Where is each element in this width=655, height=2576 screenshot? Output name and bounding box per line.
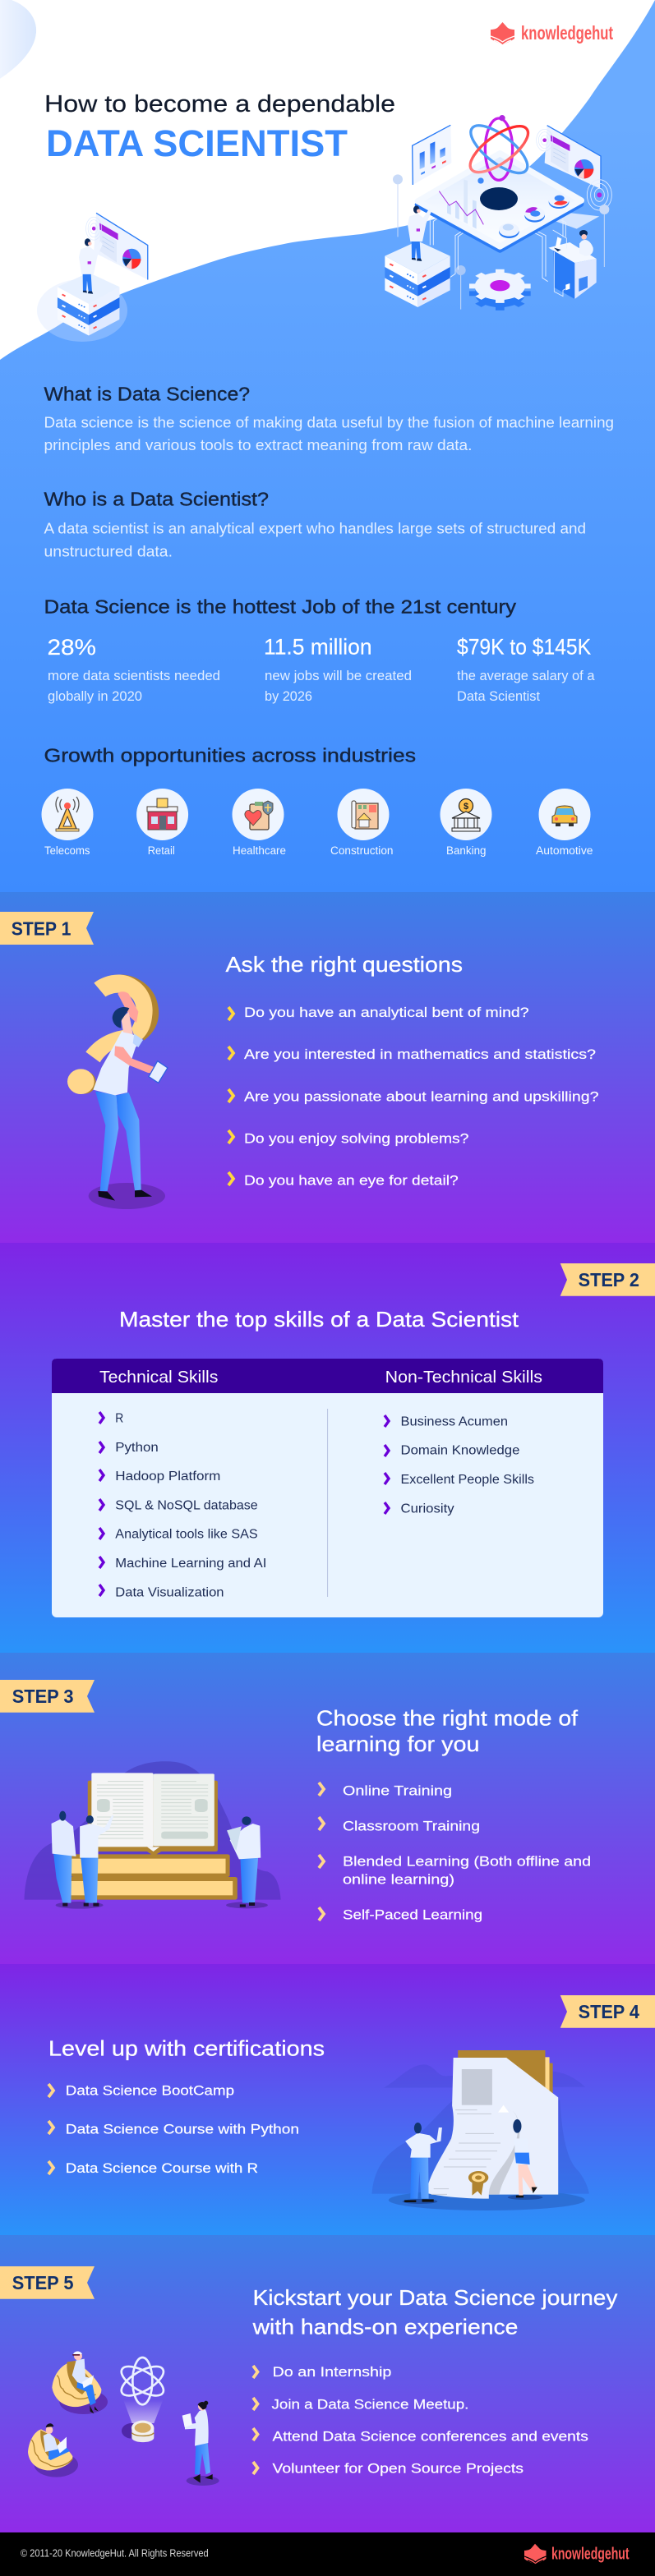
section: what is data science: Data science is the science of making data useful by the fusion of machine learning xyxy=(44,414,614,430)
certification list: Data Science BootCamp xyxy=(66,2082,234,2098)
technical skills list: SQL & NoSQL database xyxy=(115,1498,258,1512)
step 4 ribbon: STEP 4 xyxy=(579,2001,639,2022)
logo: knowledgehut footer xyxy=(524,2544,630,2564)
step 2 ribbon: STEP 2 xyxy=(579,1269,639,1290)
industry: banking: Banking xyxy=(446,844,487,857)
step 5 text: with hands-on experience xyxy=(252,2314,518,2339)
stat: salary: $79K to $145K xyxy=(457,634,591,659)
stat: 28%: globally in 2020 xyxy=(48,689,142,704)
non-technical skills list: Curiosity xyxy=(401,1502,454,1516)
stat: 28% xyxy=(48,635,220,704)
panel: step 2 xyxy=(0,1243,655,1653)
learning modes list: Online Training xyxy=(343,1782,452,1798)
step 2 ribbon xyxy=(560,1263,655,1296)
question list: Are you passionate about learning and upskilling? xyxy=(244,1088,598,1104)
skills card xyxy=(52,1359,603,1617)
learning modes list: online learning) xyxy=(343,1871,454,1887)
step 3 ribbon xyxy=(0,1680,95,1713)
step 3 text: learning for you xyxy=(316,1732,480,1756)
step 2 heading: Master the top skills of a Data Scientist xyxy=(119,1307,519,1332)
industry: construction xyxy=(330,789,393,857)
industry: healthcare: Healthcare xyxy=(233,844,286,857)
panel: step 3 xyxy=(0,1653,655,1964)
footer xyxy=(0,2532,655,2576)
title xyxy=(44,91,395,164)
section: what is data science xyxy=(44,383,614,453)
hero white wave xyxy=(0,0,655,360)
industry: retail: Retail xyxy=(148,844,175,857)
section: what is data science: What is Data Science? xyxy=(44,383,250,404)
learning modes list: Blended Learning (Both offline and xyxy=(343,1854,591,1870)
skills card: Non-Technical Skills xyxy=(385,1368,542,1387)
experience list: Join a Data Science Meetup. xyxy=(271,2396,468,2412)
certification list: Data Science Course with R xyxy=(66,2160,258,2176)
learning modes list xyxy=(319,1782,591,1923)
technical skills list: Python xyxy=(115,1441,159,1455)
section: who is a data scientist xyxy=(44,489,586,559)
learning modes list: Classroom Training xyxy=(343,1818,480,1833)
illustration: hands-on experience xyxy=(28,2351,219,2486)
section: who is a data scientist: Who is a Data Scientist? xyxy=(44,489,269,510)
industry: healthcare xyxy=(232,789,286,857)
section: growth opportunities: Growth opportunities across industries xyxy=(44,744,416,766)
stat: salary: the average salary of a xyxy=(457,669,595,683)
question list: Do you have an analytical bent of mind? xyxy=(244,1005,529,1020)
non-technical skills list: Business Acumen xyxy=(401,1415,508,1429)
illustration: left scientist on server xyxy=(37,213,148,342)
stat: 11.5 million: new jobs will be created xyxy=(265,669,412,683)
industry: banking xyxy=(441,789,491,857)
step 1 text: Ask the right questions xyxy=(225,952,463,977)
technical skills list: R xyxy=(115,1412,123,1426)
background: hero and overview blue panel xyxy=(0,0,655,892)
step 4 text: Level up with certifications xyxy=(48,2036,325,2061)
certification list xyxy=(48,2082,299,2176)
technical skills list: Data Visualization xyxy=(115,1585,224,1599)
skills card: Technical Skills xyxy=(99,1368,218,1387)
technical skills list: Hadoop Platform xyxy=(115,1470,220,1484)
panel: step 5 xyxy=(0,2235,655,2532)
copyright: © 2011-20 KnowledgeHut. All Rights Reserved xyxy=(21,2548,209,2560)
industry: telecoms: Telecoms xyxy=(44,844,90,857)
stat: salary xyxy=(457,634,595,704)
title: How to become a dependable xyxy=(44,91,395,117)
section: what is data science: principles and various tools to extract meaning from raw data. xyxy=(44,436,472,453)
section: hottest job stats: Data Science is the hottest Job of the 21st century xyxy=(44,596,516,617)
illustration: person with question mark xyxy=(67,975,168,1209)
step 5 text xyxy=(252,2285,617,2476)
illustration: certificate scroll xyxy=(371,2050,589,2210)
stat: 11.5 million xyxy=(264,634,412,704)
experience list: Volunteer for Open Source Projects xyxy=(273,2460,524,2476)
industry: automotive: Automotive xyxy=(536,844,593,857)
step 1 text xyxy=(225,952,598,1188)
logo: knowledgehut header xyxy=(491,22,613,45)
question list: Are you interested in mathematics and statistics? xyxy=(244,1046,596,1062)
non-technical skills list: Excellent People Skills xyxy=(401,1473,534,1487)
step 5 text: Kickstart your Data Science journey xyxy=(253,2285,617,2310)
step 3 text xyxy=(316,1706,591,1923)
industry: automotive xyxy=(536,789,593,857)
decorative corner blob xyxy=(0,0,36,79)
section: growth opportunities xyxy=(41,744,593,857)
industry: retail xyxy=(136,789,188,857)
non-technical skills list xyxy=(385,1415,534,1516)
technical skills list: Analytical tools like SAS xyxy=(115,1528,258,1542)
experience list xyxy=(253,2364,588,2476)
logo: knowledgehut header: knowledgehut xyxy=(521,22,613,44)
industry: telecoms xyxy=(41,789,94,857)
panel: step 4 xyxy=(0,1964,655,2235)
step 1 ribbon xyxy=(0,912,94,945)
industry: construction: Construction xyxy=(330,844,393,857)
title: DATA SCIENTIST xyxy=(46,122,348,164)
stat: 11.5 million: 11.5 million xyxy=(264,634,371,659)
industry: banking: $ xyxy=(464,802,468,812)
step 3 ribbon: STEP 3 xyxy=(12,1686,74,1707)
section: who is a data scientist: unstructured data. xyxy=(44,542,173,559)
certification list: Data Science Course with Python xyxy=(66,2122,299,2137)
step 4 ribbon xyxy=(560,1995,655,2028)
illustration: data science lab xyxy=(385,115,611,310)
stat: 11.5 million: by 2026 xyxy=(265,689,312,704)
technical skills list: Machine Learning and AI xyxy=(115,1557,266,1571)
experience list: Attend Data Science conferences and events xyxy=(273,2428,588,2444)
step 5 ribbon: STEP 5 xyxy=(12,2272,74,2293)
stat: 28%: 28% xyxy=(48,635,96,660)
stat: 28%: more data scientists needed xyxy=(48,669,220,683)
technical skills list xyxy=(99,1412,266,1599)
question list xyxy=(228,1005,598,1188)
stat: salary: Data Scientist xyxy=(457,689,540,704)
experience list: Do an Internship xyxy=(273,2364,391,2380)
step 4 text xyxy=(48,2036,325,2176)
section: who is a data scientist: A data scientist is an analytical expert who handles large sets of structured and xyxy=(44,520,586,537)
step 1 ribbon: STEP 1 xyxy=(12,918,71,940)
learning modes list: Self-Paced Learning xyxy=(343,1907,482,1923)
step 5 ribbon xyxy=(0,2266,95,2299)
section: hottest job stats xyxy=(44,596,595,704)
panel: step 1 xyxy=(0,892,655,1243)
question list: Do you have an eye for detail? xyxy=(244,1172,459,1188)
step 3 text: Choose the right mode of xyxy=(316,1706,579,1731)
non-technical skills list: Domain Knowledge xyxy=(401,1444,519,1458)
illustration: open book and readers xyxy=(24,1761,281,1909)
question list: Do you enjoy solving problems? xyxy=(244,1130,468,1146)
